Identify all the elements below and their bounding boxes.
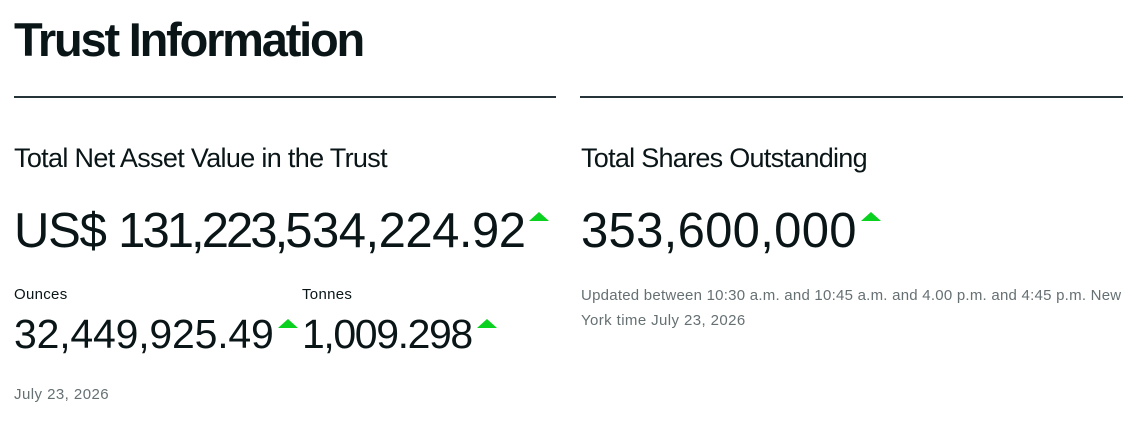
icon: shares up arrow: [861, 212, 881, 221]
panel: net asset value: [14, 143, 549, 403]
heading: total shares outstanding: Total Shares Outstanding: [581, 143, 867, 173]
title: Trust Information: [14, 13, 363, 66]
icon: up arrow: [529, 212, 549, 221]
right divider: [580, 96, 1123, 98]
heading: total net asset value: Total Net Asset Value in the Trust: [14, 143, 387, 173]
value: tonnes: 1,009.298: [302, 311, 472, 357]
panel: shares outstanding: [581, 143, 1122, 329]
icon: ounces up arrow: [278, 319, 298, 328]
label: ounces: Ounces: [14, 286, 68, 303]
label: tonnes: Tonnes: [302, 286, 352, 303]
update note: York time July 23, 2026: [581, 312, 746, 329]
icon: tonnes up arrow: [477, 319, 497, 328]
value: net asset value: US$ 131,223,534,224.92: [14, 204, 526, 258]
date: July 23, 2026: [14, 386, 109, 403]
left divider: [14, 96, 556, 98]
value: ounces: 32,449,925.49: [14, 311, 274, 357]
update note: Updated between 10:30 a.m. and 10:45 a.m. and 4.00 p.m. and 4:45 p.m. New: [581, 287, 1121, 304]
value: shares outstanding: 353,600,000: [581, 204, 857, 258]
update note: [581, 287, 1122, 329]
